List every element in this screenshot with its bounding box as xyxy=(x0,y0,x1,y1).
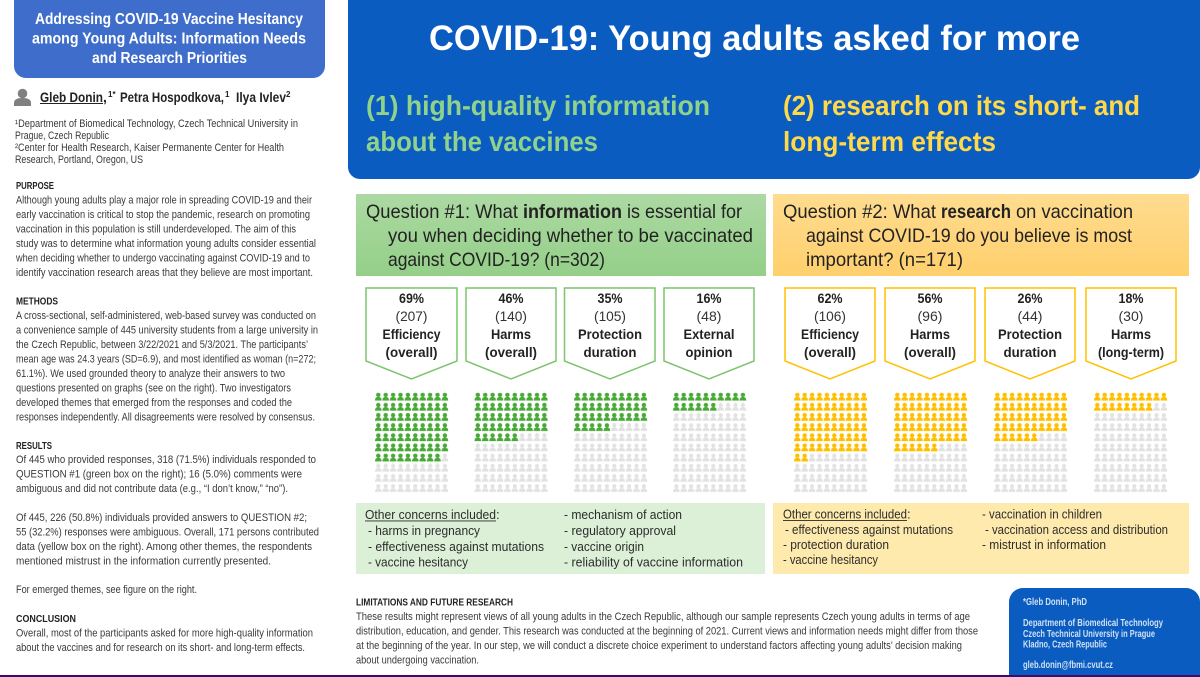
results section: ambiguous and did not contribute data (e.g., “I don’t know,” “no”). xyxy=(16,483,288,495)
callout: protection duration, question 1: duration xyxy=(584,344,636,360)
limitations and future research: These results might represent views of all young adults in the Czech Republic, although our sample represents Czech young adults in terms of age xyxy=(356,611,970,623)
purpose section: study was to determine what information young adults consider essential xyxy=(16,238,316,250)
callout: efficiency overall, question 1: (overall) xyxy=(386,344,438,360)
callout: protection duration, question 1: (105) xyxy=(594,308,626,324)
callout: harms overall, question 1: (140) xyxy=(495,308,527,324)
callout: harms overall, question 2: (96) xyxy=(918,308,942,324)
contact panel xyxy=(1009,588,1200,675)
other concerns panel, question 2: - vaccination in children xyxy=(982,506,1102,522)
callout: harms long-term, question 2 xyxy=(1086,288,1176,379)
callout: external opinion, question 1: opinion xyxy=(686,344,732,360)
purpose section: identify vaccination research areas that they believe are most important. xyxy=(16,267,313,279)
takeaway 2: long-term effects xyxy=(783,126,996,157)
callout: protection duration, question 2: (44) xyxy=(1018,308,1042,324)
callout: harms overall, question 1: 46% xyxy=(498,290,524,306)
purpose section xyxy=(15,180,316,279)
contact panel: *Gleb Donin, PhD xyxy=(1023,597,1087,608)
methods section: a convenience sample of 445 university students from a large university in xyxy=(16,324,318,336)
callout: efficiency overall, question 1: Efficiency xyxy=(382,326,441,342)
limitations and future research: at the beginning of the year. In our step, we will conduct a discrete choice experiment to understand factors affecting young adults’ decision making xyxy=(356,640,962,652)
callout: harms overall, question 1: Harms xyxy=(491,326,531,342)
authors: 2 xyxy=(286,90,291,99)
callout: harms long-term, question 2: (30) xyxy=(1118,308,1144,324)
conclusion section: about the vaccines and for research on its short- and long-term effects. xyxy=(16,642,305,654)
callout: harms long-term, question 2: Harms xyxy=(1111,326,1151,342)
callout: protection duration, question 2: 26% xyxy=(1018,290,1043,306)
other concerns panel, question 2: Other concerns included xyxy=(783,506,907,522)
authors: Gleb Donin xyxy=(40,90,103,105)
poster title panel: Addressing COVID-19 Vaccine Hesitancy xyxy=(35,11,303,28)
takeaway 1: (1) high-quality information xyxy=(366,90,710,121)
conclusion section: Overall, most of the participants asked for more high-quality information xyxy=(16,628,313,640)
callout: efficiency overall, question 2: Efficiency xyxy=(801,326,859,342)
pictogram: 35 percent xyxy=(574,393,648,494)
methods section: mean age was 24.3 years (SD=6.9), and most identified as woman (n=272; xyxy=(16,353,316,365)
contact panel: Kladno, Czech Republic xyxy=(1023,640,1107,650)
authors xyxy=(40,90,291,105)
contact panel: Czech Technical University in Prague xyxy=(1023,629,1155,640)
results section: RESULTS xyxy=(16,440,52,452)
question 1 box xyxy=(356,194,766,276)
other concerns panel, question 2: - protection duration xyxy=(783,537,889,552)
question 2 box: on vaccination xyxy=(1016,201,1133,223)
callout: efficiency overall, question 2: 62% xyxy=(818,290,843,306)
pictogram: 16 percent xyxy=(673,393,747,494)
question 2 box: against COVID-19 do you believe is most xyxy=(806,225,1133,247)
callout: harms overall, question 2 xyxy=(885,288,975,379)
question 1 box: you when deciding whether to be vaccinated xyxy=(388,225,753,247)
callout: efficiency overall, question 1: 69% xyxy=(399,290,424,306)
limitations and future research: LIMITATIONS AND FUTURE RESEARCH xyxy=(356,596,513,608)
headline banner xyxy=(348,0,1200,179)
other concerns panel, question 1: - reliability of vaccine information xyxy=(564,554,743,570)
pictogram: 69 percent xyxy=(375,393,449,494)
contact panel: gleb.donin@fbmi.cvut.cz xyxy=(1023,660,1113,671)
authors: Petra Hospodkova, xyxy=(120,90,224,105)
purpose section: vaccination in this population is still underdeveloped. The aim of this xyxy=(16,224,297,236)
results section: QUESTION #1 (green box on the right); 16 (5.0%) comments were xyxy=(16,468,302,480)
callout: protection duration, question 1 xyxy=(564,288,655,379)
callout: efficiency overall, question 1 xyxy=(366,288,457,379)
pictogram: 18 percent xyxy=(1094,393,1168,494)
conclusion section xyxy=(16,613,313,654)
question 2 box: Question #2: What xyxy=(783,201,937,223)
icon: author person xyxy=(14,89,31,106)
callout: protection duration, question 2: Protection xyxy=(998,326,1062,342)
results section: mentioned mistrust in the information currently presented. xyxy=(16,556,271,568)
methods section: 61.1%). We used grounded theory to analyze their answers to two xyxy=(16,368,285,380)
other concerns panel, question 2: - vaccination access and distribution xyxy=(985,522,1168,537)
authors: 1* xyxy=(108,90,116,99)
question 2 box xyxy=(773,194,1189,276)
question 1 box: is essential for xyxy=(627,201,742,223)
methods section xyxy=(16,296,318,423)
other concerns panel, question 2: - vaccine hesitancy xyxy=(783,552,878,567)
callout: harms overall, question 2: 56% xyxy=(918,290,943,306)
results section: data (yellow box on the right). Among other themes, the respondents xyxy=(16,541,313,553)
callout: efficiency overall, question 2: (106) xyxy=(814,308,846,324)
question 2 box: research xyxy=(941,201,1011,223)
main headline: COVID-19: Young adults asked for more xyxy=(429,19,1080,58)
results section: 55 (32.2%) responses were ambiguous. Overall, 171 persons contributed xyxy=(16,526,319,538)
results section xyxy=(16,440,319,596)
question 1 box: Question #1: What xyxy=(366,201,519,223)
other concerns panel, question 1 xyxy=(356,503,765,574)
authors: 1 xyxy=(225,90,230,99)
methods section: questions presented on graphs (see on the right). Two investigators xyxy=(16,382,292,394)
other concerns panel, question 1: - effectiveness against mutations xyxy=(368,539,544,554)
other concerns panel, question 2 xyxy=(773,503,1189,574)
contact panel: Department of Biomedical Technology xyxy=(1023,618,1163,629)
callout: protection duration, question 1: Protection xyxy=(578,326,642,342)
affiliations: ²Center for Health Research, Kaiser Permanente Center for Health xyxy=(15,142,284,154)
callout: external opinion, question 1 xyxy=(664,288,754,379)
pictogram: 46 percent xyxy=(474,393,548,494)
poster title panel xyxy=(14,0,325,78)
pictogram: 26 percent xyxy=(994,393,1068,494)
other concerns panel, question 1: : xyxy=(496,507,500,522)
authors: , xyxy=(103,90,107,105)
callout: external opinion, question 1: 16% xyxy=(696,290,722,306)
poster title panel: among Young Adults: Information Needs xyxy=(32,30,306,48)
results section: Of 445 who provided responses, 318 (71.5%) individuals responded to xyxy=(16,454,316,466)
purpose section: Although young adults play a major role in spreading COVID-19 and their xyxy=(16,194,312,206)
callout: protection duration, question 2 xyxy=(985,288,1075,379)
methods section: the Czech Republic, between 3/22/2021 and 5/3/2021. The participants’ xyxy=(16,339,308,351)
poster title panel: and Research Priorities xyxy=(92,50,247,67)
other concerns panel, question 1: - vaccine hesitancy xyxy=(368,554,468,570)
affiliations xyxy=(15,118,298,166)
takeaway 1 xyxy=(366,90,710,157)
other concerns panel, question 1: - vaccine origin xyxy=(564,539,644,554)
limitations and future research: about undergoing vaccination. xyxy=(356,654,479,666)
methods section: A cross-sectional, self-administered, web-based survey was conducted on xyxy=(16,310,316,322)
limitations and future research xyxy=(356,596,978,666)
other concerns panel, question 2: : xyxy=(907,506,911,522)
takeaway 2: (2) research on its short- and xyxy=(783,90,1140,121)
callout: protection duration, question 1: 35% xyxy=(598,290,623,306)
callout: harms overall, question 1 xyxy=(466,288,556,379)
affiliations: Research, Portland, Oregon, US xyxy=(15,154,143,166)
callout: harms overall, question 2: Harms xyxy=(910,326,950,342)
other concerns panel, question 1: - mechanism of action xyxy=(564,507,682,522)
question 1 box: information xyxy=(523,201,622,223)
other concerns panel, question 1: - harms in pregnancy xyxy=(368,523,480,538)
methods section: METHODS xyxy=(16,296,58,308)
other concerns panel, question 1: - regulatory approval xyxy=(564,523,676,538)
takeaway 2 xyxy=(783,90,1140,157)
callout: harms long-term, question 2: (long-term) xyxy=(1098,344,1164,360)
limitations and future research: distribution, education, and gender. This research was conducted at the beginning of 2021. Current views and information needs might differ from those xyxy=(356,626,978,638)
purpose section: when deciding whether to undergo vaccinating against COVID-19 and to xyxy=(15,252,310,264)
other concerns panel, question 2: - mistrust in information xyxy=(982,537,1106,552)
callout: external opinion, question 1: External xyxy=(684,326,734,342)
methods section: developed themes that emerged from the responses and coded the xyxy=(16,397,292,409)
pictogram: 62 percent xyxy=(794,393,868,494)
question 1 box: against COVID-19? (n=302) xyxy=(388,249,605,271)
callout: efficiency overall, question 1: (207) xyxy=(396,308,428,324)
takeaway 1: about the vaccines xyxy=(366,126,598,157)
other concerns panel, question 1: Other concerns included xyxy=(365,507,496,522)
results section: Of 445, 226 (50.8%) individuals provided answers to QUESTION #2; xyxy=(16,512,307,524)
callout: external opinion, question 1: (48) xyxy=(696,308,722,324)
callout: protection duration, question 2: duration xyxy=(1004,344,1056,360)
callout: harms overall, question 1: (overall) xyxy=(485,344,537,360)
methods section: responses independently. All disagreements were resolved by consensus. xyxy=(16,411,315,423)
pictogram: 56 percent xyxy=(894,393,968,494)
affiliations: ¹Department of Biomedical Technology, Czech Technical University in xyxy=(15,118,298,130)
results section: For emerged themes, see figure on the right. xyxy=(16,584,197,596)
other concerns panel, question 2: - effectiveness against mutations xyxy=(785,522,953,537)
purpose section: early vaccination is critical to stop the pandemic, research on promoting xyxy=(16,209,310,221)
callout: harms long-term, question 2: 18% xyxy=(1118,290,1144,306)
question 2 box: important? (n=171) xyxy=(806,249,963,271)
conclusion section: CONCLUSION xyxy=(16,613,76,625)
callout: harms overall, question 2: (overall) xyxy=(904,344,956,360)
purpose section: PURPOSE xyxy=(16,180,54,192)
callout: efficiency overall, question 2 xyxy=(785,288,875,379)
authors: Ilya Ivlev xyxy=(236,90,286,105)
affiliations: Prague, Czech Republic xyxy=(15,130,109,142)
callout: efficiency overall, question 2: (overall) xyxy=(804,344,856,360)
